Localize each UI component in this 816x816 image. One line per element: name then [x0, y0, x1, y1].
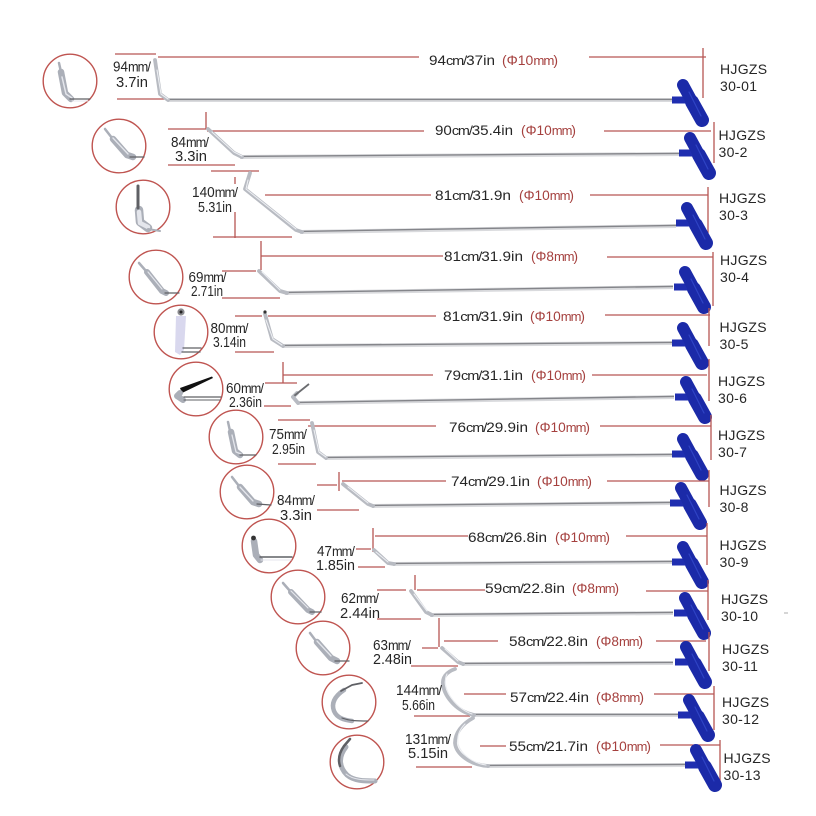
model name: 30-7 — [718, 444, 747, 460]
tip length label: 63mm/ — [373, 638, 411, 654]
diameter label: (Φ10mm) — [555, 530, 610, 545]
length label: 58cm/22.8in — [509, 633, 588, 649]
model name — [718, 373, 765, 406]
tip length label: 140mm/ — [192, 185, 238, 201]
tip length label — [188, 270, 227, 300]
diameter label: (Φ10mm) — [596, 739, 651, 754]
diameter label: (Φ10mm) — [537, 474, 592, 489]
tip length label: 3.14in — [213, 335, 246, 351]
length label: 74cm/29.1in — [451, 473, 530, 489]
tip length label — [171, 135, 209, 165]
model name: 30-4 — [720, 269, 749, 285]
tip length label — [316, 544, 355, 574]
rod 30-5 — [154, 305, 767, 363]
model name: HJGZS — [722, 694, 769, 710]
tool shaft — [374, 550, 673, 564]
circle detail: tip 30-3 — [116, 180, 170, 234]
tip length label — [269, 427, 307, 458]
model name: HJGZS — [718, 127, 766, 143]
rod 30-8 — [220, 465, 767, 524]
model name — [718, 427, 765, 460]
model name: HJGZS — [718, 373, 765, 389]
dimension lines — [211, 171, 708, 238]
dimension lines — [416, 740, 720, 788]
diameter label: (Φ8mm) — [596, 634, 643, 649]
tip length label — [373, 638, 412, 668]
diameter label: (Φ8mm) — [596, 690, 644, 705]
circle detail: tip 30-11 — [296, 621, 350, 675]
tip length label — [405, 732, 451, 762]
model name: HJGZS — [722, 641, 769, 657]
tool shaft — [312, 423, 672, 458]
model name — [722, 694, 769, 727]
length label: 90cm/35.4in — [435, 122, 513, 138]
length label: 81cm/31.9in — [443, 308, 523, 324]
model name — [720, 319, 767, 352]
rod 30-2 — [92, 112, 766, 173]
blue T handle — [672, 439, 702, 474]
model name: HJGZS — [720, 61, 767, 77]
diameter label: (Φ8mm) — [531, 249, 578, 264]
tip length label: 80mm/ — [210, 321, 249, 337]
circle detail: tip 30-9 — [242, 519, 296, 573]
dimension lines — [377, 575, 708, 620]
model name — [720, 61, 767, 94]
dimension lines — [356, 523, 707, 567]
model name: 30-10 — [721, 608, 758, 624]
length label: 57cm/22.4in — [510, 689, 589, 705]
model name: 30-3 — [719, 207, 748, 223]
circle detail: tip 30-01 — [43, 54, 97, 108]
tool shaft — [245, 173, 676, 232]
model name: HJGZS — [719, 190, 766, 206]
tool shaft — [443, 669, 678, 715]
length label: 76cm/29.9in — [449, 419, 528, 435]
model name: 30-5 — [720, 336, 749, 352]
tip length label: 2.36in — [229, 395, 262, 411]
dimension lines — [317, 470, 709, 510]
dimension lines — [414, 686, 714, 730]
diameter label: (Φ10mm) — [521, 123, 576, 138]
tool shaft — [442, 648, 673, 664]
tip length label: 3.3in — [175, 149, 207, 165]
circle detail: tip 30-6 — [169, 362, 223, 416]
length label: 81cm/31.9in — [444, 248, 523, 264]
tip length label: 84mm/ — [171, 135, 209, 151]
blue T handle — [674, 598, 704, 633]
tip length label: 3.7in — [116, 75, 148, 91]
model name: HJGZS — [721, 591, 768, 607]
circle detail: tip 30-10 — [271, 570, 325, 624]
tip length label — [192, 185, 238, 216]
tool shaft — [343, 484, 671, 506]
blue T handle — [676, 208, 706, 243]
tip length label: 69mm/ — [188, 270, 227, 286]
model name: HJGZS — [720, 319, 767, 335]
model name: 30-6 — [718, 390, 747, 406]
model name: 30-2 — [718, 144, 748, 160]
circle detail: tip 30-13 — [330, 735, 384, 789]
model name: 30-9 — [720, 554, 749, 570]
dimension lines — [278, 415, 711, 464]
rod 30-7 — [209, 410, 765, 474]
diameter label: (Φ8mm) — [572, 581, 619, 596]
circle detail: tip 30-8 — [220, 465, 274, 519]
blue T handle — [675, 382, 705, 417]
rod 30-12 — [322, 669, 769, 735]
model name — [718, 127, 766, 160]
model name: 30-13 — [724, 767, 761, 783]
tip length label: 84mm/ — [277, 493, 315, 509]
blue T handle — [672, 328, 702, 363]
dimension lines — [222, 241, 713, 306]
tool shaft — [259, 271, 673, 293]
model name — [722, 641, 769, 674]
dimension lines — [235, 308, 710, 352]
rod 30-4 — [129, 241, 767, 307]
tip length label: 1.85in — [316, 558, 355, 574]
tip length label — [210, 321, 249, 351]
rod 30-10 — [271, 570, 768, 633]
length label: 59cm/22.8in — [485, 580, 565, 596]
tip length label — [226, 381, 264, 411]
tip length label: 5.31in — [198, 200, 232, 216]
rod 30-13 — [330, 718, 771, 789]
tool shaft — [155, 60, 676, 100]
blue T handle — [670, 488, 700, 523]
length label: 94cm/37in — [429, 52, 495, 68]
blue T handle — [678, 700, 708, 735]
blue T handle — [685, 750, 715, 785]
tip length label — [113, 60, 151, 91]
tip length label: 131mm/ — [405, 732, 451, 748]
circle detail: tip 30-4 — [129, 250, 183, 304]
diameter label: (Φ10mm) — [502, 53, 558, 68]
blue T handle — [675, 647, 705, 682]
tip length label: 2.44in — [340, 606, 380, 622]
length label: 81cm/31.9n — [435, 187, 511, 203]
model name: HJGZS — [720, 537, 767, 553]
blue T handle — [672, 547, 702, 582]
model name: HJGZS — [720, 482, 767, 498]
circle detail: tip 30-5 — [154, 305, 208, 359]
model name: HJGZS — [724, 750, 771, 766]
model name: HJGZS — [718, 427, 765, 443]
dimension lines — [411, 618, 709, 671]
tip length label: 60mm/ — [226, 381, 264, 397]
tool shaft — [208, 129, 682, 157]
tip length label: 5.15in — [408, 746, 448, 762]
tip length label — [277, 493, 315, 524]
model name — [720, 252, 767, 285]
model name: 30-8 — [720, 499, 749, 515]
model name: HJGZS — [720, 252, 767, 268]
tip length label: 144mm/ — [396, 683, 442, 699]
tip length label: 5.66in — [402, 698, 435, 714]
circle detail: tip 30-12 — [322, 675, 376, 729]
diameter label: (Φ10mm) — [530, 309, 585, 324]
tip length label: 62mm/ — [341, 591, 379, 607]
circle detail: tip 30-7 — [209, 410, 263, 464]
tip length label: 2.71in — [191, 284, 223, 300]
dimension lines — [115, 48, 706, 99]
rod 30-6 — [169, 359, 765, 417]
length label: 68cm/26.8in — [468, 529, 547, 545]
rod 30-11 — [296, 618, 769, 682]
rod 30-3 — [116, 171, 766, 243]
tool shaft — [455, 718, 685, 766]
tool shaft — [411, 591, 673, 615]
model name — [719, 190, 766, 223]
tip length label — [396, 683, 442, 714]
tip length label — [340, 591, 380, 622]
tool shaft — [293, 384, 674, 403]
tip length label: 3.3in — [280, 508, 312, 524]
tool shaft — [263, 310, 673, 346]
tip length label: 47mm/ — [317, 544, 355, 560]
diameter label: (Φ10mm) — [531, 368, 586, 383]
blue T handle — [679, 138, 709, 173]
model name: 30-01 — [720, 78, 757, 94]
dimension lines — [264, 359, 709, 406]
model name — [720, 482, 767, 515]
diameter label: (Φ10mm) — [519, 188, 574, 203]
model name — [720, 537, 767, 570]
model name — [721, 591, 768, 624]
tip length label: 75mm/ — [269, 427, 307, 443]
circle detail: tip 30-2 — [92, 119, 146, 173]
tip length label: 2.95in — [272, 442, 305, 458]
rod 30-9 — [242, 519, 767, 582]
dimension lines — [168, 112, 714, 165]
diameter label: (Φ10mm) — [535, 420, 590, 435]
model name — [724, 750, 771, 783]
length label: 79cm/31.1in — [444, 367, 523, 383]
rod 30-01 — [43, 48, 767, 120]
blue T handle — [672, 85, 702, 120]
length label: 55cm/21.7in — [509, 738, 588, 754]
model name: 30-12 — [722, 711, 759, 727]
tip length label: 2.48in — [373, 652, 412, 668]
tip length label: 94mm/ — [113, 60, 151, 76]
model name: 30-11 — [722, 658, 758, 674]
blue T handle — [674, 272, 704, 307]
